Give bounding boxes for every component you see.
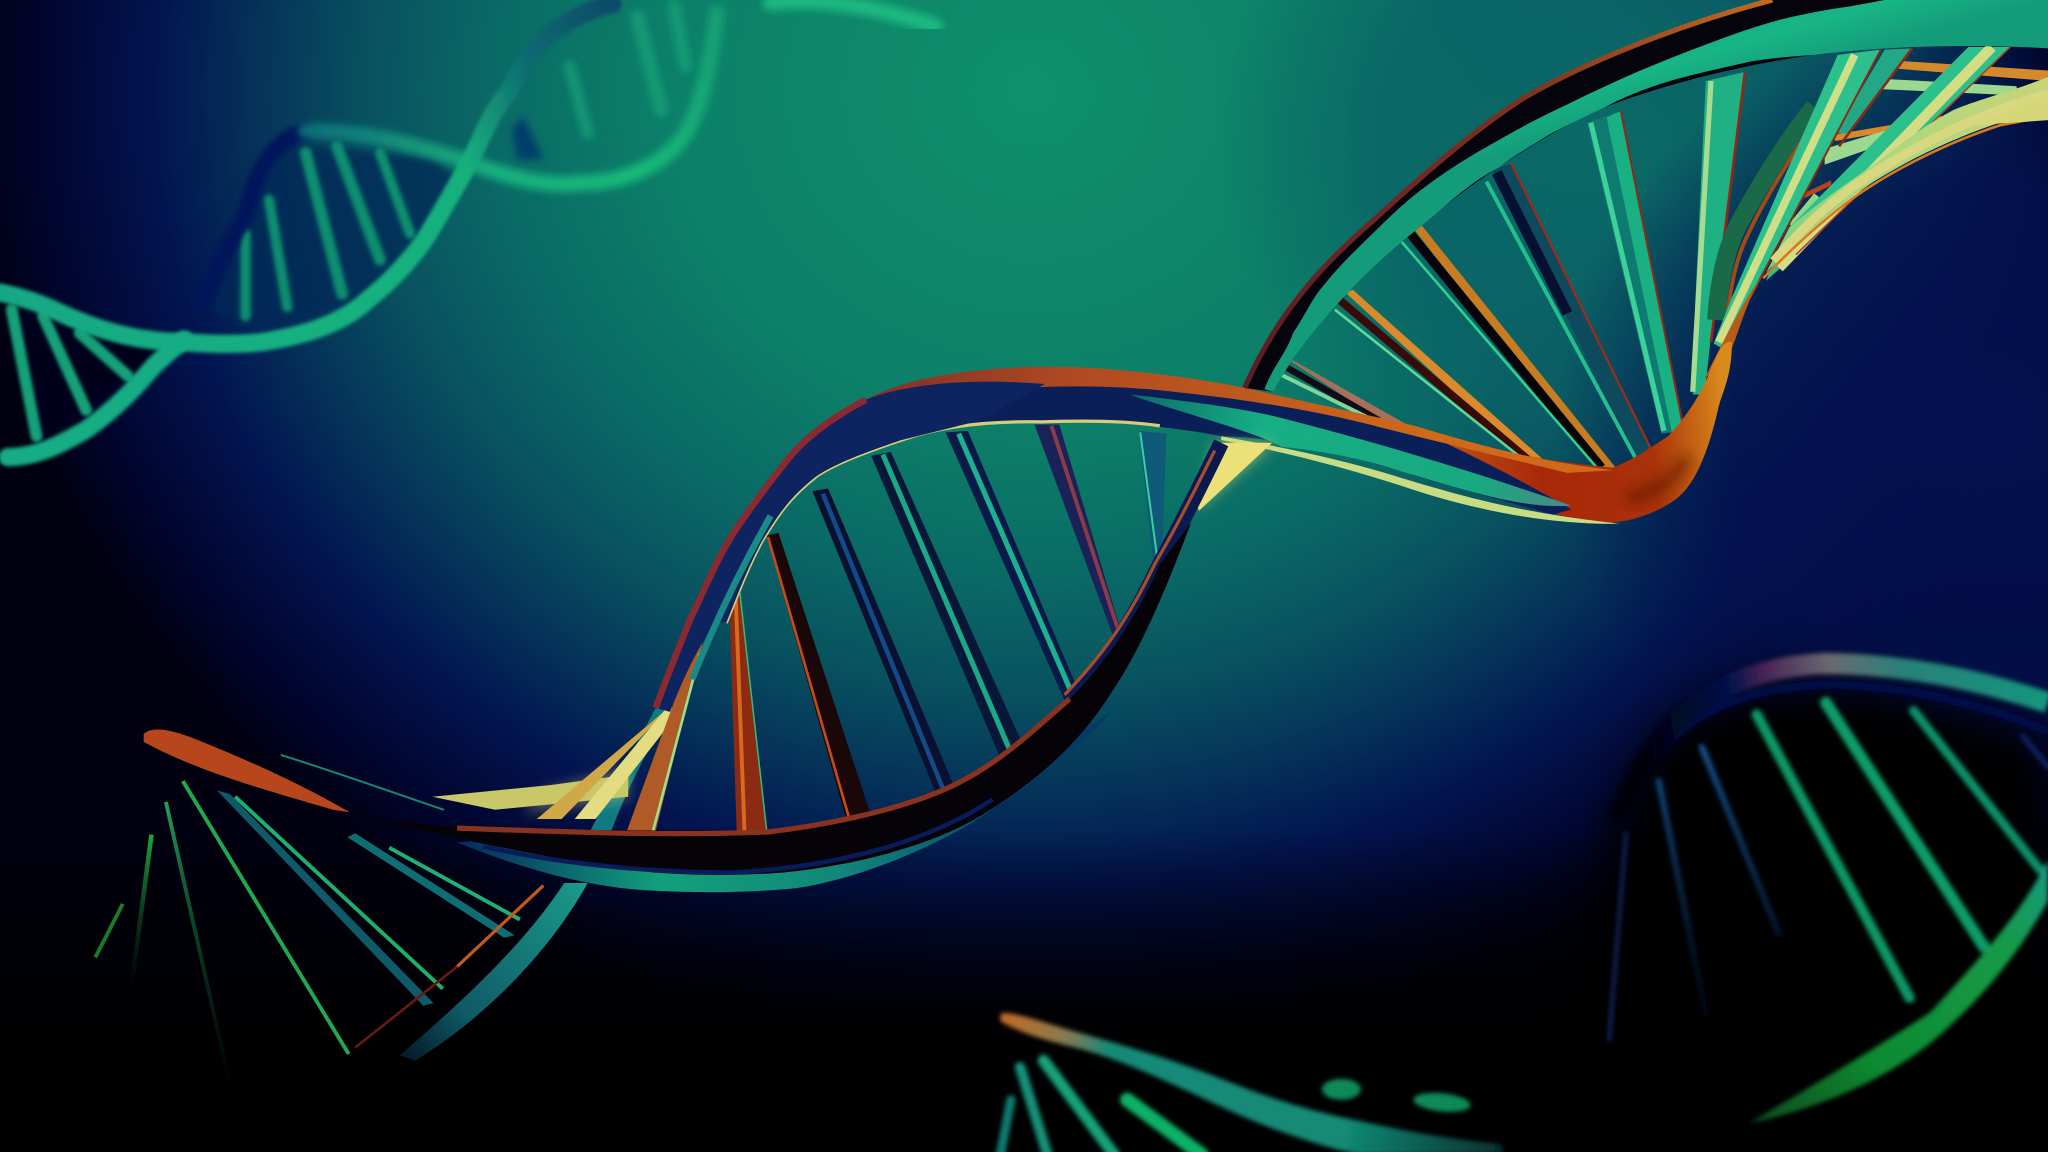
rung: tan [1281, 357, 1418, 431]
upper-right rungs [1281, 47, 2048, 473]
strand one: descent past the yellow wedge [1064, 443, 1221, 699]
rung 8 [627, 643, 703, 831]
black mass [144, 522, 1191, 875]
back bars [1789, 60, 2048, 232]
main ribbon: top orange edge [866, 367, 1613, 473]
far strand: upper right yellow-green to orange [1704, 77, 2048, 379]
rust tip [144, 729, 350, 812]
strand one: lower sweep [144, 522, 1191, 892]
lower bright edge [1221, 436, 1620, 524]
central rungs [627, 424, 1166, 831]
rust outer edge [1245, 0, 1772, 388]
yellow highlight wedge [1194, 443, 1275, 511]
lower-left tube [355, 883, 588, 1061]
rung 4 [871, 452, 1023, 755]
rust top edge [457, 699, 1070, 834]
underside green [457, 712, 1112, 892]
rungs [1000, 1061, 1202, 1152]
green blade [1130, 394, 1571, 506]
navy rim [1626, 684, 2048, 810]
rung: green 2 [1693, 72, 1745, 394]
upper-strand lower continuation [590, 708, 670, 831]
blurred DNA helix: bottom centre [1000, 1013, 1502, 1152]
second strand [8, 340, 184, 457]
main ribbon: middle band [726, 382, 1620, 623]
rung 5 [812, 488, 955, 792]
rungs [1609, 703, 2048, 1040]
rung 1 [1139, 431, 1166, 580]
blurred DNA helix: top left [0, 1, 935, 457]
left section rungs [12, 310, 128, 436]
navy band [483, 799, 993, 872]
rung: teal-red [1486, 163, 1656, 462]
black band [1245, 0, 2048, 392]
far strand [306, 13, 717, 184]
navy crest [202, 131, 306, 303]
rung: black-orange [1401, 225, 1616, 473]
top-right tail [771, 1, 935, 26]
strand one: upper right arc [1245, 0, 2048, 392]
rung: light green 1 [1714, 50, 1881, 349]
rung: green 1 [1587, 111, 1684, 434]
yellow crossing bars [432, 692, 684, 819]
dark interiors [7, 115, 543, 451]
rung 2 [1034, 424, 1123, 639]
middle section rungs [246, 146, 410, 316]
upper arc [1617, 664, 2048, 823]
dark band [849, 382, 1571, 515]
rung 6 [767, 533, 870, 820]
main ribbon: left curve [656, 382, 1045, 712]
main ribbon: red bend [1415, 342, 1732, 524]
thin green line on tip [281, 755, 444, 810]
first strand [0, 4, 613, 344]
curved dark-green back strand [1716, 107, 1822, 327]
rung: teal behind [1835, 48, 1912, 146]
rung: light green 2 [1766, 47, 2010, 281]
rung 7 [729, 586, 767, 831]
far section rungs [569, 7, 686, 133]
green strand [1749, 859, 2048, 1123]
thin yellow inner edge [726, 421, 1160, 623]
lower-left rungs [95, 781, 520, 1096]
dash marks [1322, 1079, 1471, 1114]
blurred DNA helix: bottom right [1609, 664, 2048, 1123]
strand [1000, 1013, 1502, 1152]
rung: orange [1335, 290, 1546, 462]
green tube [1264, 0, 2048, 392]
rung 3 [946, 431, 1080, 700]
